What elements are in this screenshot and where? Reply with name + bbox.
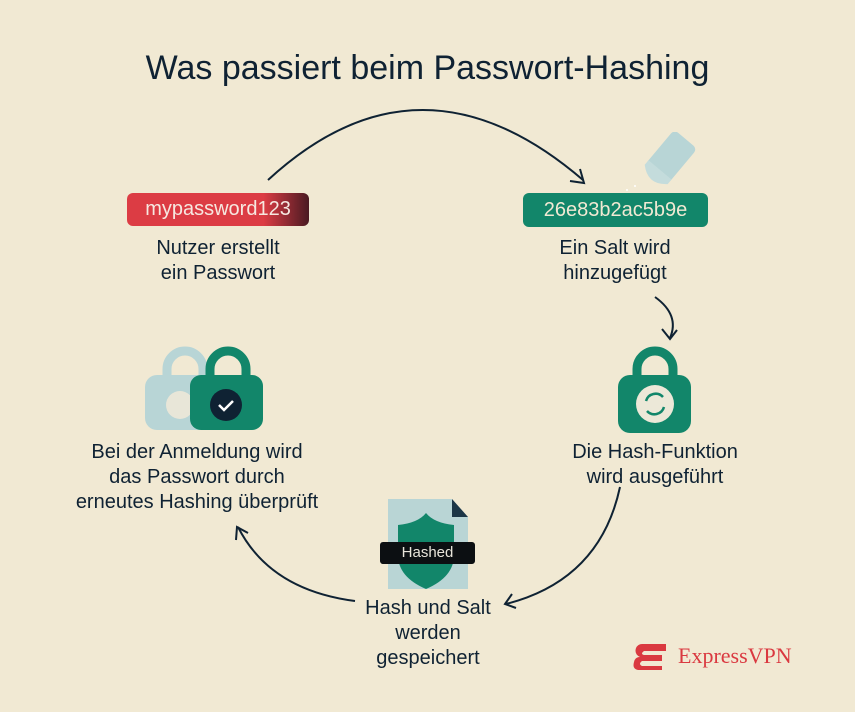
- text: step 4: [365, 597, 491, 669]
- logo: ExpressVPN: ExpressVPN: [678, 643, 792, 668]
- icon: lock with refresh: [618, 346, 691, 433]
- label: Hashed: [380, 542, 475, 564]
- text: step 1: ein Passwort: [161, 262, 275, 284]
- text: step 1: [156, 237, 280, 284]
- red password pill: mypassword123: [145, 198, 291, 220]
- text: step 4: werden: [395, 622, 461, 644]
- text: step 2: hinzugefügt: [563, 262, 667, 284]
- text: step 1: Nutzer erstellt: [156, 237, 280, 259]
- label: Hashed: Hashed: [402, 544, 453, 561]
- text: step 3: wird ausgeführt: [587, 466, 723, 488]
- text: step 3: [572, 441, 738, 488]
- text: step 2: Ein Salt wird: [559, 237, 671, 259]
- text: step 3: Die Hash-Funktion: [572, 441, 738, 463]
- text: step 5: Bei der Anmeldung wird: [91, 441, 303, 463]
- red password pill: [127, 193, 309, 226]
- text: step 4: Hash und Salt: [365, 597, 491, 619]
- icon: two locks: [145, 346, 263, 430]
- text: step 5: erneutes Hashing überprüft: [76, 491, 318, 513]
- logo: ExpressVPN: [634, 643, 792, 670]
- green hash pill: 26e83b2ac5b9e: [544, 199, 687, 221]
- text: step 5: das Passwort durch: [109, 466, 285, 488]
- icon: salt shaker: [626, 132, 696, 191]
- green hash pill: [523, 193, 708, 227]
- icon: hashed document: [380, 499, 475, 589]
- title: Was passiert beim Passwort-Hashing: [146, 49, 709, 87]
- text: step 4: gespeichert: [376, 647, 480, 669]
- text: step 2: [559, 237, 671, 284]
- text: step 5: [76, 441, 318, 513]
